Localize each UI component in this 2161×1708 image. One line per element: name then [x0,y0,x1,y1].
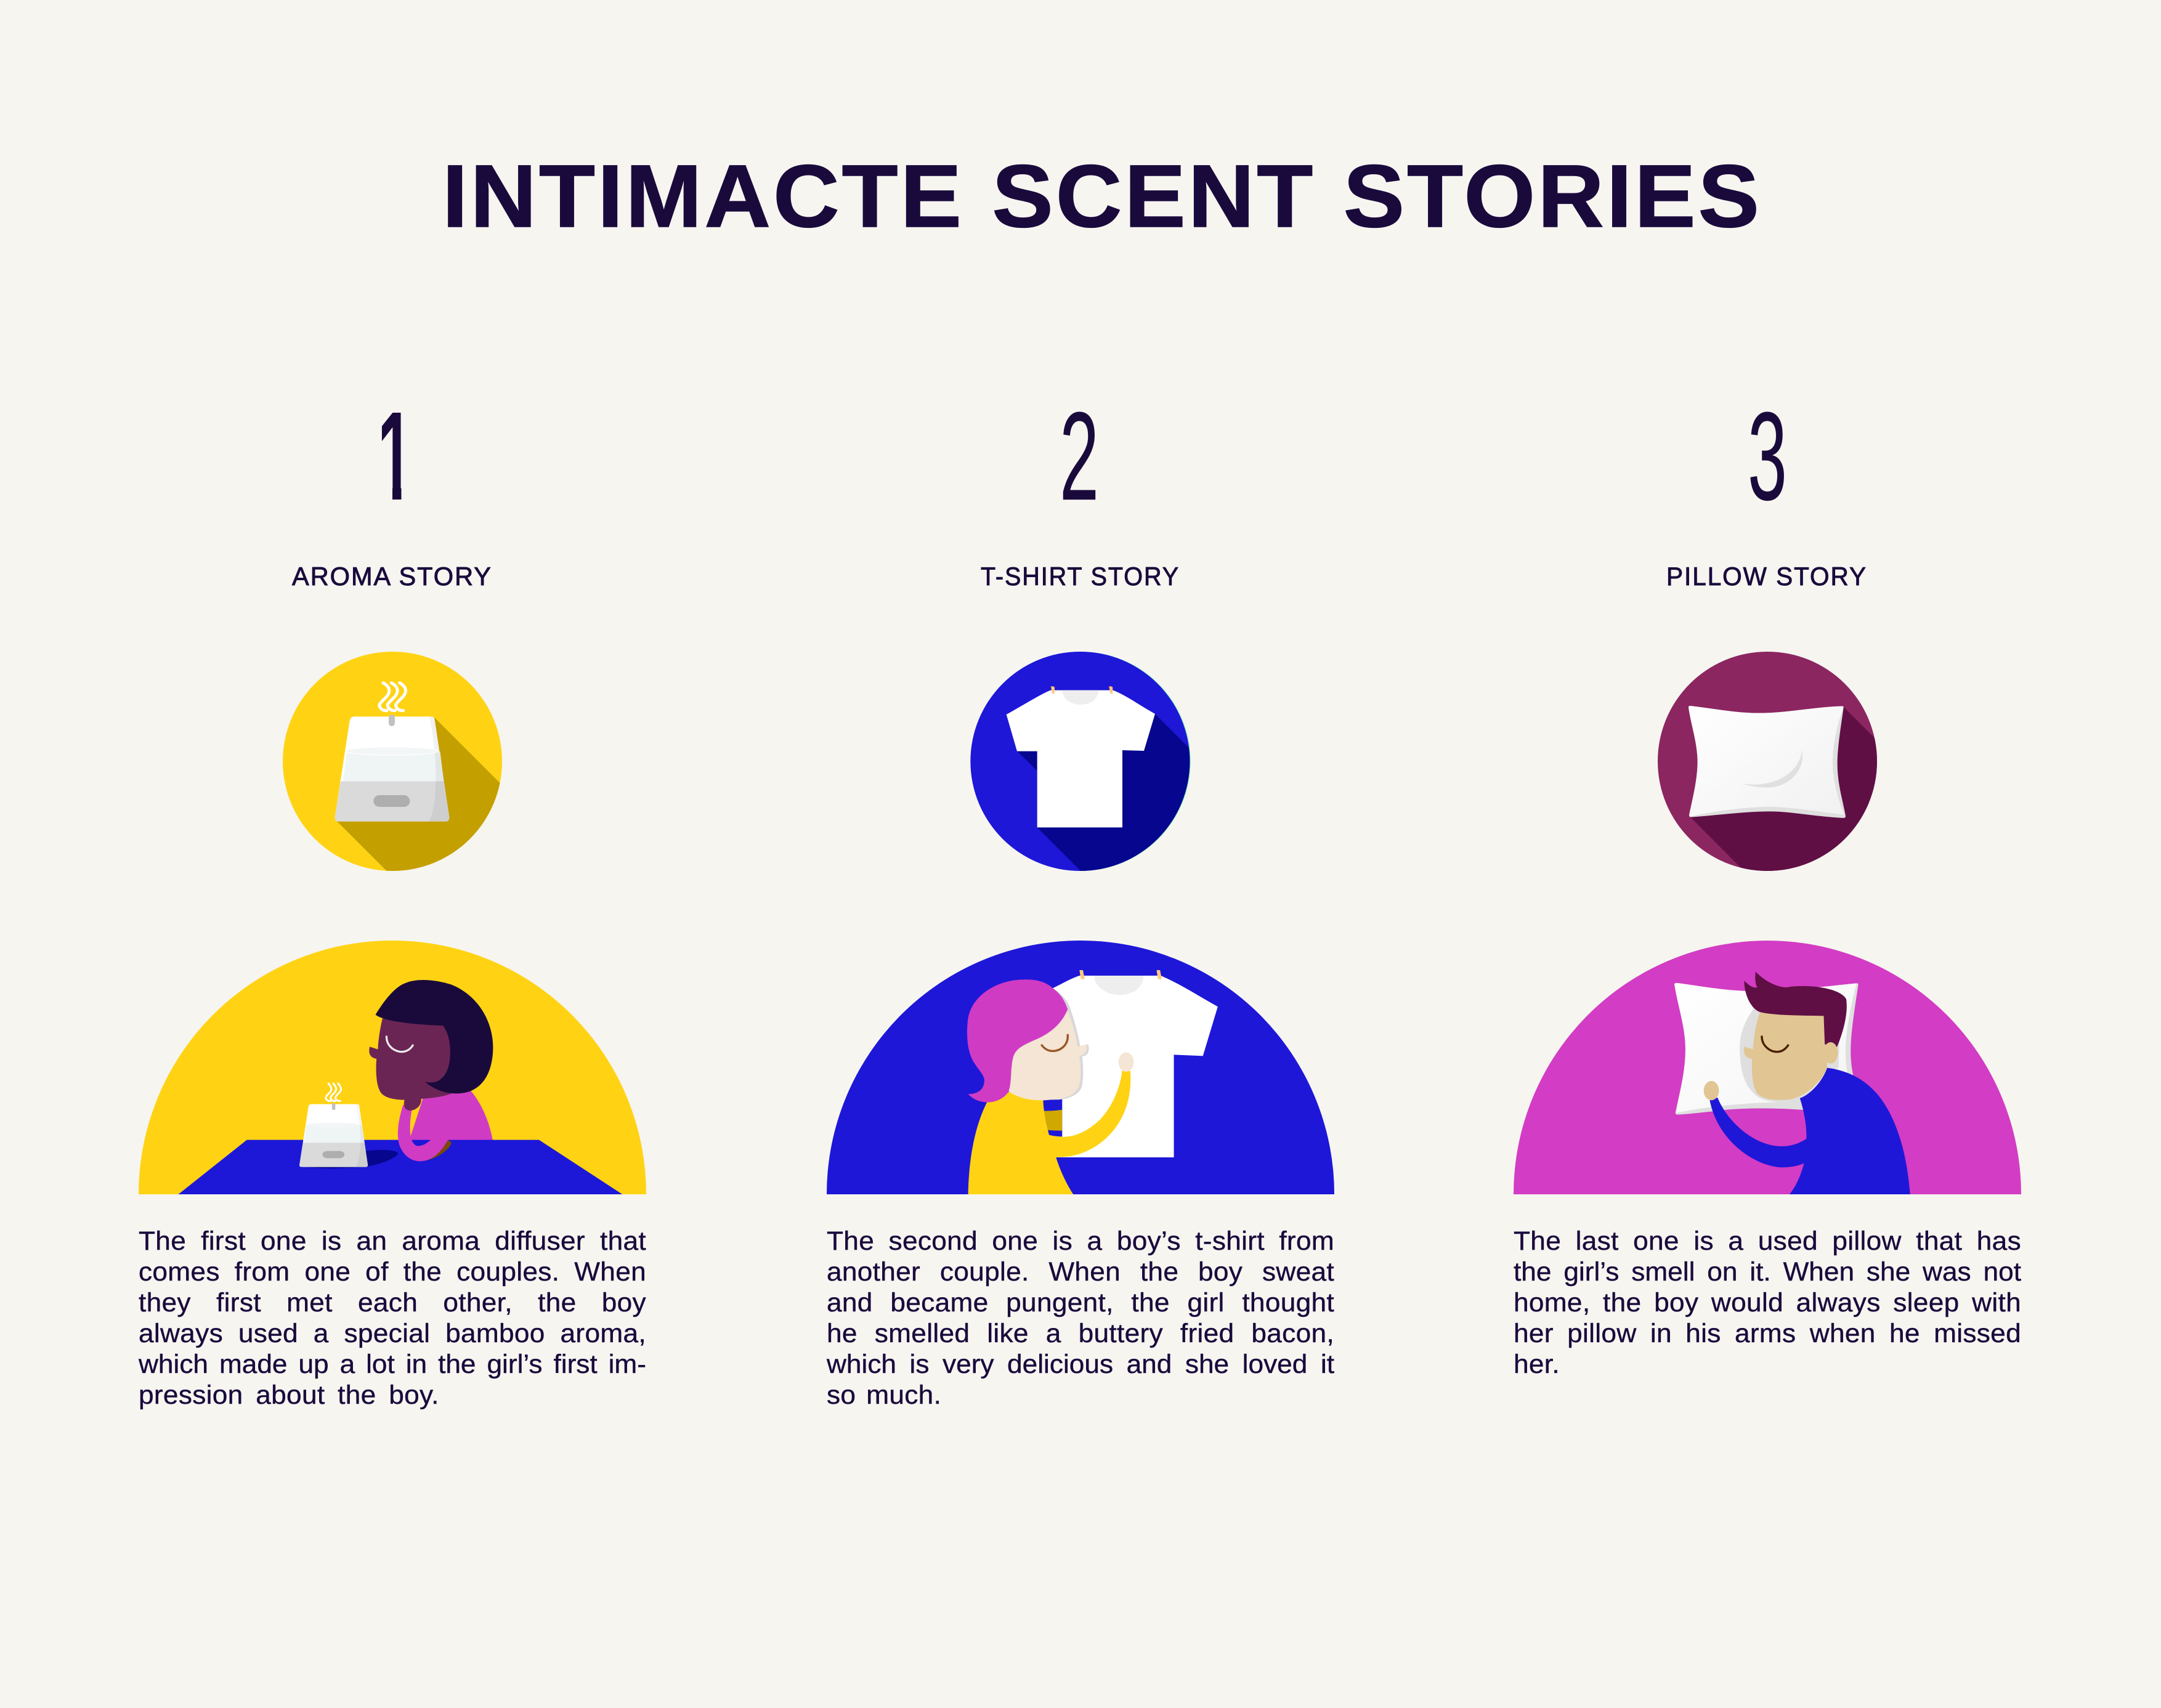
story text 1: which made up a lot in the girl’s first im- [139,1350,646,1379]
story text 2: another couple. When the boy sweat [827,1258,1334,1287]
illustration: man sleeping on pillow [1514,941,2021,1194]
story text 3 [1514,1227,2021,1379]
icon: pillow [1658,652,1877,871]
story text 2: he smelled like a buttery fried bacon, [827,1319,1334,1348]
story text 2: and became pungent, the girl thought [827,1289,1334,1317]
heading: t-shirt story: T-SHIRT STORY [981,562,1180,591]
title: INTIMACTE SCENT STORIES [442,147,1762,246]
heading: aroma story: AROMA STORY [292,562,492,591]
story text 2: which is very delicious and she loved it [827,1350,1334,1379]
story text 1: they first met each other, the boy [139,1289,646,1317]
story text 2 [827,1227,1334,1410]
story text 2: The second one is a boy’s t-shirt from [827,1227,1334,1256]
heading: pillow story: PILLOW STORY [1666,562,1867,591]
story text 3: home, the boy would always sleep with [1514,1289,2021,1317]
panel: t-shirt story [827,386,1334,1410]
story text 3: her pillow in his arms when he missed [1514,1319,2021,1348]
story text 1: always used a special bamboo aroma, [139,1319,646,1348]
story text 1 [138,1227,646,1410]
number 2: 2 [1060,386,1099,527]
icon: t-shirt [970,652,1190,871]
icon: aroma diffuser [283,652,502,871]
story text 1: comes from one of the couples. When [139,1258,646,1287]
number 3: 3 [1748,386,1787,527]
panel: aroma story [138,413,646,1410]
number 1: 1 [376,386,415,526]
panel: pillow story [1514,386,2021,1379]
story text 3: The last one is a used pillow that has [1514,1227,2021,1256]
illustration: woman with boyfriend's t-shirt [827,941,1334,1194]
story text 1: pression about the boy. [139,1381,439,1410]
story text 2: so much. [827,1381,941,1410]
illustration: woman smelling diffuser at table [139,941,646,1194]
story text 1: The first one is an aroma diffuser that [139,1227,646,1256]
story text 3: the girl’s smell on it. When she was not [1514,1258,2021,1287]
story text 3: her. [1514,1350,1560,1379]
